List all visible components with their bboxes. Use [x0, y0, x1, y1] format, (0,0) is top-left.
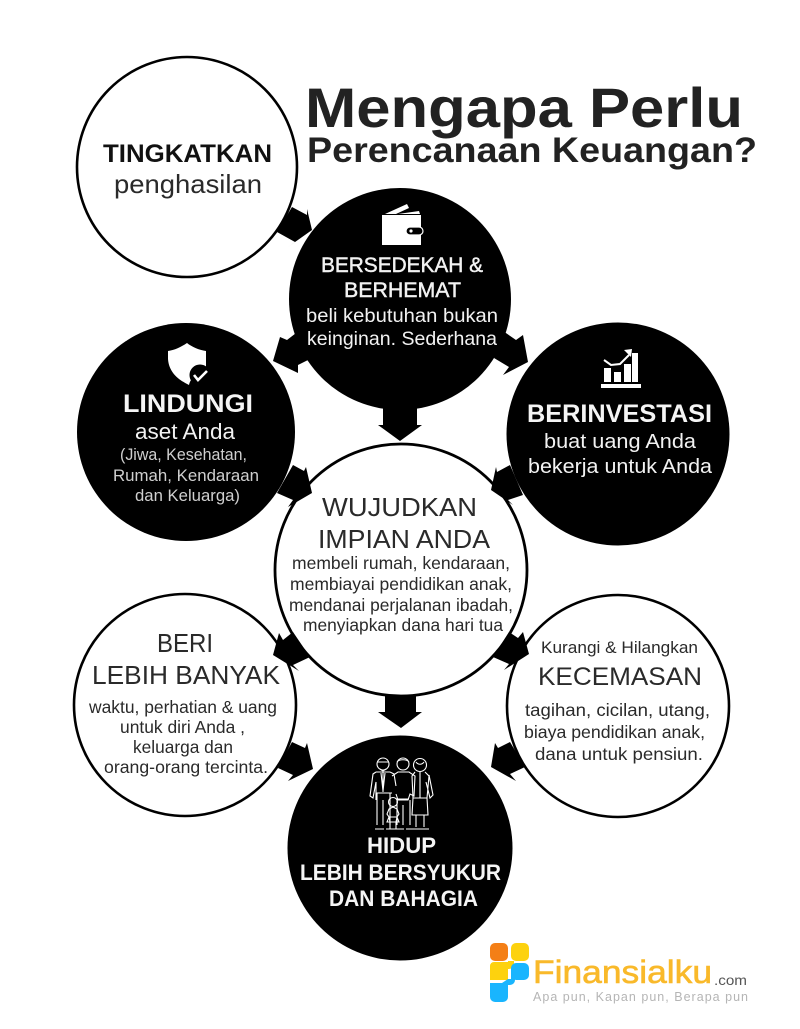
icon: shield [168, 343, 210, 385]
panel: beri lebih banyak: LEBIH BANYAK [92, 660, 281, 690]
title [305, 76, 757, 170]
panel: kurangi kecemasan: KECEMASAN [538, 663, 702, 691]
icon: family [370, 758, 433, 829]
panel: berinvestasi: buat uang Anda [544, 430, 697, 453]
logo: finansialku [490, 943, 748, 1004]
panel: tingkatkan penghasilan: TINGKATKAN [103, 140, 272, 168]
panel: wujudkan impian: WUJUDKAN [322, 494, 477, 522]
panel: beri lebih banyak: keluarga dan [133, 737, 233, 757]
icon: rising bar chart [601, 349, 641, 388]
panel: wujudkan impian: membiayai pendidikan anak, [290, 574, 512, 594]
arrow: wujudkan to kecemasan [493, 632, 529, 670]
logo: finansialku: Apa pun, Kapan pun, Berapa pun [533, 990, 748, 1004]
panel: hidup lebih bersyukur dan bahagia: HIDUP [367, 833, 436, 858]
panel: lindungi aset: (Jiwa, Kesehatan, [120, 446, 247, 464]
panel: berinvestasi: bekerja untuk Anda [528, 455, 713, 478]
panel: berinvestasi: BERINVESTASI [527, 400, 712, 428]
icon: wallet [382, 204, 423, 245]
panel: kurangi kecemasan: dana untuk pensiun. [535, 744, 703, 764]
panel: lindungi aset: Rumah, Kendaraan [113, 467, 259, 485]
panel: kurangi kecemasan: biaya pendidikan anak, [524, 722, 705, 742]
arrow: bersedekah to lindungi [273, 330, 312, 373]
panel: lindungi aset: dan Keluarga) [135, 487, 240, 505]
panel: beri lebih banyak [74, 594, 296, 816]
panel: hidup lebih bersyukur dan bahagia: LEBIH BERSYUKUR [300, 860, 501, 885]
arrow: lindungi to wujudkan [277, 465, 312, 507]
panel: beri lebih banyak: orang-orang tercinta. [104, 757, 268, 777]
panel: berinvestasi [506, 322, 730, 546]
panel: beri lebih banyak: BERI [157, 628, 213, 658]
logo: finansialku: .com [714, 972, 747, 988]
panel: wujudkan impian [275, 444, 527, 696]
panel: hidup lebih bersyukur dan bahagia [288, 736, 512, 960]
panel: beri lebih banyak: untuk diri Anda , [120, 717, 245, 737]
panel: wujudkan impian: menyiapkan dana hari tua [303, 615, 503, 635]
panel: wujudkan impian: membeli rumah, kendaraan, [292, 553, 510, 573]
panel: bersedekah dan berhemat: BERSEDEKAH & [321, 254, 483, 277]
title: Perencanaan Keuangan? [307, 131, 757, 170]
panel: wujudkan impian: mendanai perjalanan ibadah, [289, 595, 513, 615]
logo: finansialku: Finansialku [533, 954, 712, 990]
panel: kurangi kecemasan [507, 595, 729, 817]
arrow: wujudkan to hidup [378, 696, 422, 728]
panel: bersedekah dan berhemat [289, 188, 511, 410]
arrow: tingkatkan to bersedekah [277, 207, 312, 247]
panel: lindungi aset [77, 323, 295, 541]
panel: lindungi aset: LINDUNGI [123, 390, 253, 418]
title: Mengapa Perlu [305, 76, 743, 139]
arrow: wujudkan to beri [273, 632, 310, 671]
arrow: berinvestasi to wujudkan [491, 465, 523, 505]
panel: beri lebih banyak: waktu, perhatian & uang [88, 697, 277, 717]
arrow: kecemasan to hidup [491, 742, 525, 781]
panel: bersedekah dan berhemat: beli kebutuhan bukan [306, 305, 498, 327]
panel: kurangi kecemasan: tagihan, cicilan, utang, [525, 700, 710, 720]
panel: tingkatkan penghasilan: penghasilan [114, 169, 262, 199]
icon: logo squares [490, 943, 529, 1002]
panel: tingkatkan penghasilan [77, 57, 297, 277]
arrow: beri to hidup [278, 742, 313, 781]
panel: bersedekah dan berhemat: keinginan. Sederhana [307, 328, 497, 350]
panel: lindungi aset: aset Anda [135, 419, 236, 444]
panel: kurangi kecemasan: Kurangi & Hilangkan [541, 639, 698, 657]
arrow: bersedekah to berinvestasi [494, 331, 528, 375]
arrow: bersedekah to wujudkan [378, 405, 422, 441]
panel: wujudkan impian: IMPIAN ANDA [318, 526, 490, 554]
panel: bersedekah dan berhemat: BERHEMAT [344, 279, 461, 302]
panel: hidup lebih bersyukur dan bahagia: DAN BAHAGIA [329, 886, 478, 911]
